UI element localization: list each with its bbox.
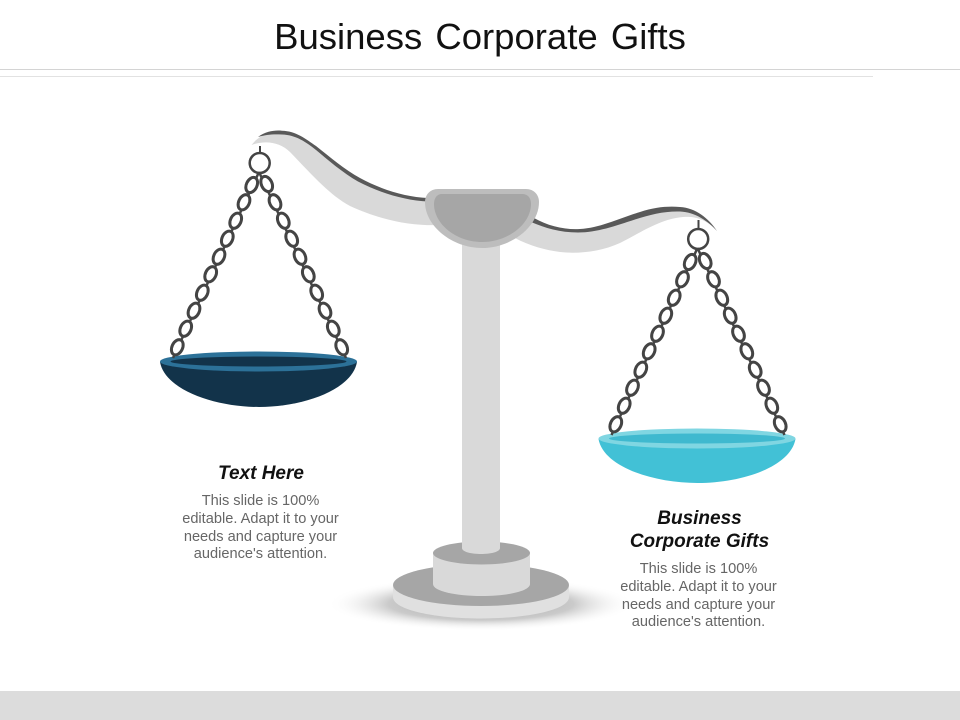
- left body text: editable. Adapt it to your: [182, 511, 339, 527]
- right heading: Corporate Gifts: [630, 531, 769, 552]
- right body text: editable. Adapt it to your: [620, 579, 777, 595]
- right body text: needs and capture your: [622, 597, 775, 613]
- right heading: [630, 508, 769, 552]
- right body text: audience's attention.: [632, 614, 765, 630]
- left body text: audience's attention.: [194, 546, 327, 562]
- footer band: [0, 691, 960, 720]
- scale base: [327, 542, 635, 631]
- scale post: [462, 235, 500, 554]
- left body text: [182, 493, 339, 562]
- left pan bowl: [160, 352, 357, 407]
- right pan chains: [608, 248, 788, 435]
- left text block: [182, 463, 339, 562]
- left pan hook and ring: [250, 146, 270, 173]
- left pan chains: [169, 172, 350, 358]
- right heading: Business: [657, 508, 742, 529]
- left hanging pan: [160, 146, 357, 407]
- left body text: This slide is 100%: [202, 493, 319, 509]
- left heading: Text Here: [218, 463, 304, 484]
- right body text: [620, 561, 777, 630]
- right pan hook and ring: [688, 220, 708, 249]
- right body text: This slide is 100%: [640, 561, 757, 577]
- scale beam: [252, 131, 717, 253]
- title: Business Corporate Gifts: [274, 16, 686, 57]
- left body text: needs and capture your: [184, 529, 337, 545]
- scale pivot mount: [425, 189, 539, 248]
- right hanging pan: [598, 220, 796, 483]
- right pan bowl: [598, 428, 796, 483]
- right text block: [620, 508, 777, 630]
